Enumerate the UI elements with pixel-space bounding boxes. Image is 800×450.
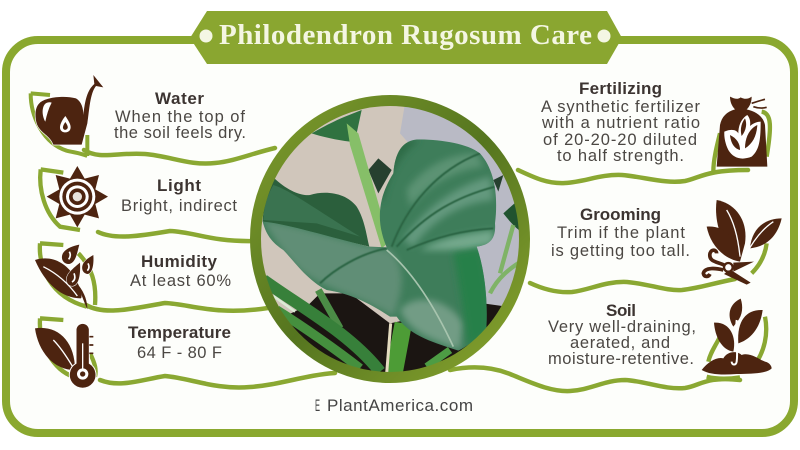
text: temperature: 64 F - 80 F [137, 344, 222, 362]
text: light: Light [157, 176, 201, 195]
text: temperature: Temperature [128, 323, 231, 342]
icon: fertilizer bag [713, 97, 770, 172]
text: humidity: Humidity [141, 252, 218, 271]
title banner [190, 11, 622, 64]
text: fertilizing [541, 79, 700, 165]
text: temperature [128, 323, 231, 362]
icon: humidity leaf and drops [35, 243, 95, 309]
text: fertilizing: to half strength. [557, 147, 684, 165]
photo ring [256, 100, 524, 378]
icon: thermometer and leaf [35, 318, 96, 388]
text: soil: Soil [606, 301, 636, 320]
text: soil: Very well-draining, [548, 318, 696, 336]
text: water: the soil feels dry. [114, 124, 246, 142]
icon: seedling in soil [702, 299, 772, 379]
text: fertilizing: with a nutrient ratio [541, 114, 700, 132]
text: grooming [551, 205, 690, 260]
icon: pruning shears and leaves [703, 200, 782, 285]
source credit: E [315, 396, 320, 415]
icon: sun [40, 166, 108, 230]
text: humidity [130, 252, 231, 290]
text: light: Bright, indirect [121, 197, 237, 215]
text: fertilizing: of 20-20-20 diluted [543, 131, 697, 149]
text: light [121, 176, 237, 215]
text: fertilizing: Fertilizing [579, 79, 662, 98]
text: soil [548, 301, 696, 368]
text: humidity: At least 60% [130, 272, 231, 290]
text: water: Water [155, 89, 204, 108]
title banner: Philodendron Rugosum Care [219, 19, 592, 51]
central plant photo [250, 90, 537, 390]
icon: watering can [31, 75, 103, 156]
source credit: PlantAmerica.com [327, 396, 473, 415]
text: grooming: is getting too tall. [551, 242, 690, 260]
text: soil: moisture-retentive. [548, 350, 694, 368]
text: fertilizing: A synthetic fertilizer [541, 98, 700, 116]
text: grooming: Trim if the plant [557, 224, 685, 242]
text: water [114, 89, 246, 142]
text: soil: aerated, and [570, 334, 670, 352]
wavy connector lines [84, 148, 748, 391]
text: water: When the top of [115, 108, 245, 126]
text: grooming: Grooming [580, 205, 661, 224]
